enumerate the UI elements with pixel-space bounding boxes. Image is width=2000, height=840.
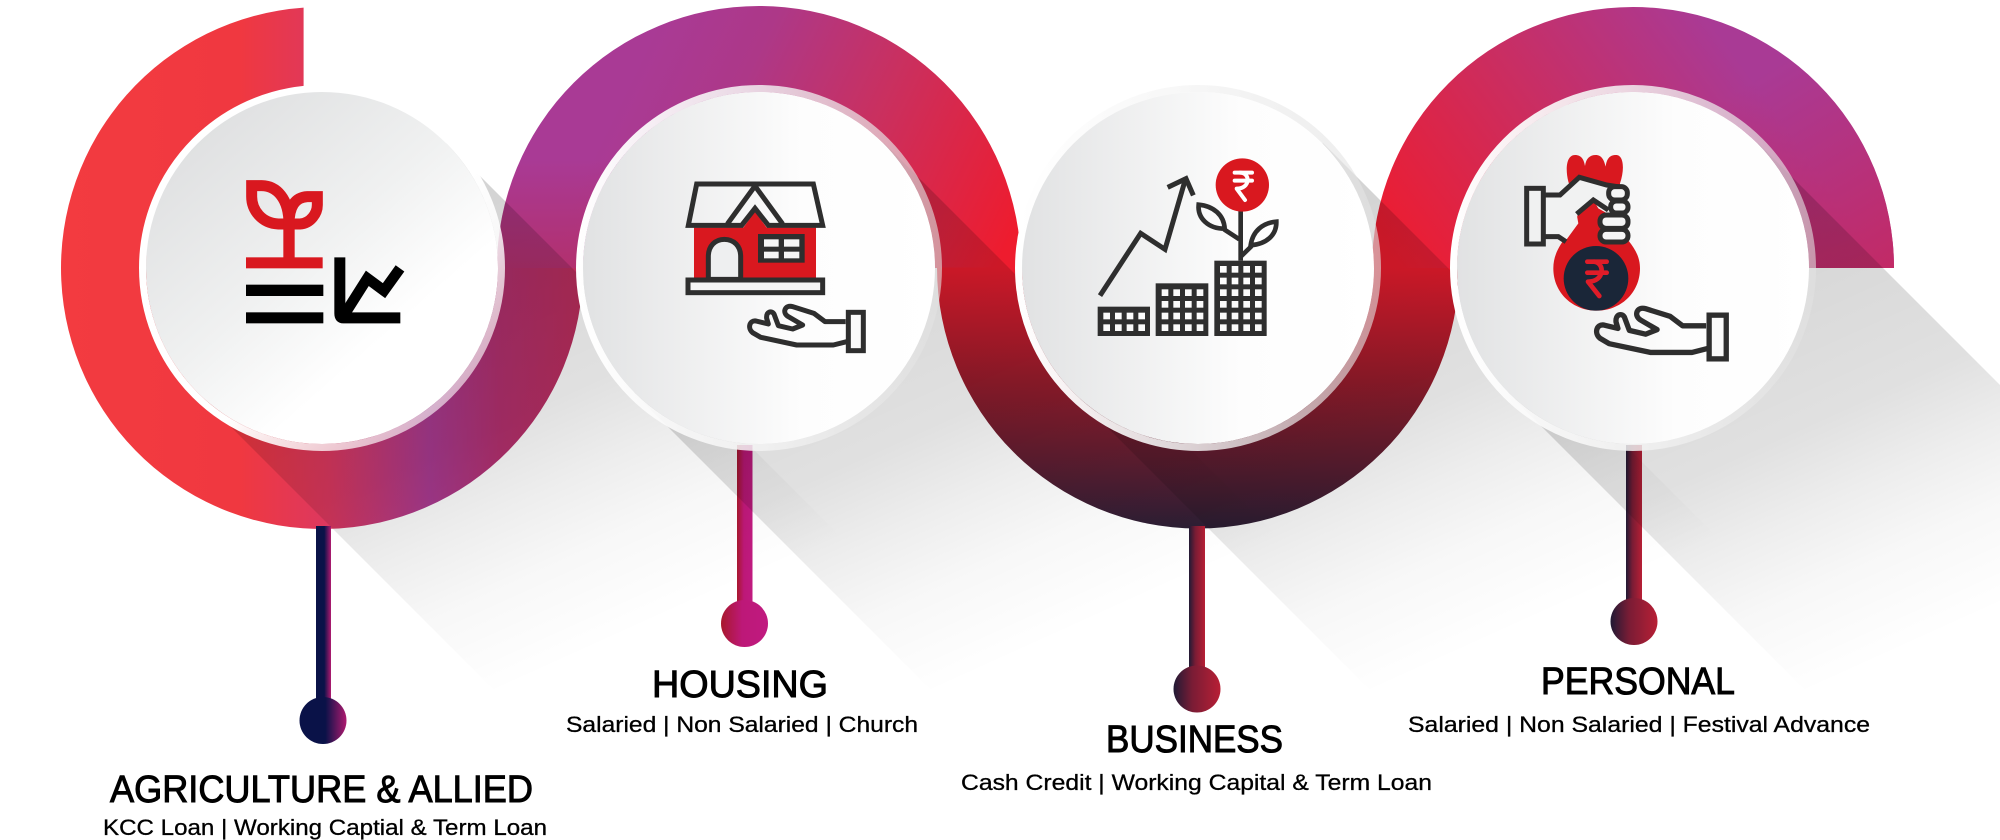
long shadow: circle 1 [197, 143, 1144, 840]
ribbon: business ring segment [937, 268, 1459, 528]
long shadow: circle 4 [1508, 143, 2000, 840]
connector stem and dot: business [1174, 526, 1220, 712]
heading: personal: PERSONAL [1541, 661, 1735, 703]
long shadow: circle 2 [634, 143, 1581, 840]
text block: business [961, 719, 1432, 795]
subtext: personal: Salaried | Non Salaried | Festival Advance [1408, 712, 1870, 737]
connector stem and dot: personal [1610, 445, 1658, 645]
ribbon: agriculture ring segment [61, 8, 583, 529]
icon: money bag passed between hands [1527, 155, 1726, 359]
text block: agriculture [103, 769, 547, 840]
heading: housing: HOUSING [652, 664, 828, 706]
icon: plant and growth chart [246, 186, 400, 323]
circle: business disk [1018, 88, 1378, 448]
ribbon: housing ring segment [497, 6, 1021, 268]
subtext: business: Cash Credit | Working Capital & Term Loan [961, 770, 1432, 795]
circle: personal disk [1454, 88, 1812, 448]
subtext: agriculture: KCC Loan | Working Captial & Term Loan [103, 815, 547, 840]
ribbon: personal ring segment [1372, 7, 1894, 268]
text block: personal [1408, 661, 1870, 737]
icon: house on hand [688, 184, 863, 351]
long shadow: circle 3 [1073, 143, 2000, 840]
heading: business: BUSINESS [1106, 719, 1283, 761]
connector stem and dot: housing [721, 445, 768, 647]
connector stem and dot: agriculture [300, 526, 346, 744]
circle: housing disk [580, 88, 938, 448]
subtext: housing: Salaried | Non Salaried | Church [566, 712, 918, 737]
text block: housing [566, 664, 918, 737]
icon: business growth with rupee plant [1098, 158, 1276, 336]
heading: agriculture: AGRICULTURE & ALLIED [110, 769, 533, 811]
circle: agriculture disk [142, 88, 502, 448]
